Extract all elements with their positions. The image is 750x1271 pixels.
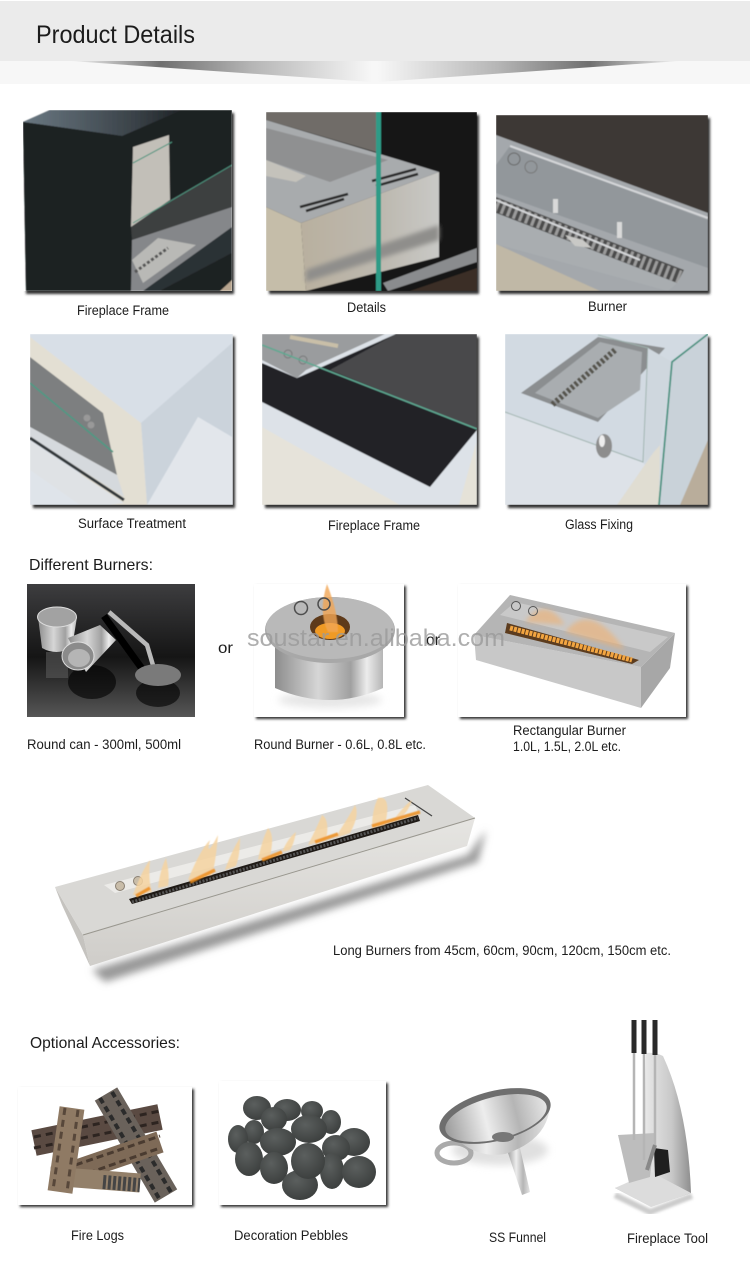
icon: snuffer (104, 612, 181, 686)
icon: handles (634, 1020, 655, 1055)
caption: Details (347, 300, 386, 315)
panel: glass fixing (505, 334, 710, 532)
panel: fireplace frame white (262, 334, 479, 533)
header banner (0, 1, 750, 84)
caption: Round Burner - 0.6L, 0.8L etc. (254, 737, 426, 752)
panel: round can (27, 584, 195, 752)
caption: Fire Logs (71, 1228, 124, 1243)
panel: surface treatment (30, 334, 235, 531)
panel: long burner (55, 785, 671, 982)
watermark: soustar.en.alibaba.com (247, 625, 505, 652)
caption: Round can - 300ml, 500ml (27, 737, 181, 752)
panel: fire logs (18, 1087, 194, 1243)
panel: ss funnel (434, 1078, 556, 1245)
caption: Fireplace Frame (328, 518, 420, 533)
"or" separator: or (426, 632, 441, 649)
caption: Long Burners from 45cm, 60cm, 90cm, 120cm, 150cm etc. (333, 943, 671, 958)
icon: cups (38, 607, 116, 672)
icon: reflections (46, 652, 180, 707)
caption: Fireplace Frame (77, 303, 169, 318)
caption: Surface Treatment (78, 516, 186, 531)
panel: details (266, 112, 479, 315)
panel: burner (496, 115, 710, 314)
caption: Fireplace Tool (627, 1231, 708, 1246)
title: Product Details (36, 21, 195, 49)
caption: SS Funnel (489, 1230, 546, 1245)
icon: flames (133, 798, 420, 896)
heading: optional accessories: Optional Accessories: (30, 1035, 180, 1052)
panel: rectangular burner (458, 584, 688, 754)
panel: fireplace frame black (23, 110, 234, 318)
"or" separator: or (218, 640, 234, 657)
caption: 1.0L, 1.5L, 2.0L etc. (513, 739, 621, 754)
panel: fireplace tool (615, 1020, 708, 1246)
caption: Burner (588, 299, 627, 314)
icon: flame (323, 584, 338, 632)
panel: round burner (254, 584, 426, 752)
caption (513, 723, 626, 754)
caption: Rectangular Burner (513, 723, 626, 738)
caption: Decoration Pebbles (234, 1228, 348, 1243)
heading: different burners: Different Burners: (29, 557, 153, 574)
panel: decoration pebbles (219, 1081, 388, 1243)
icon: flames (525, 609, 625, 650)
caption: Glass Fixing (565, 517, 633, 532)
